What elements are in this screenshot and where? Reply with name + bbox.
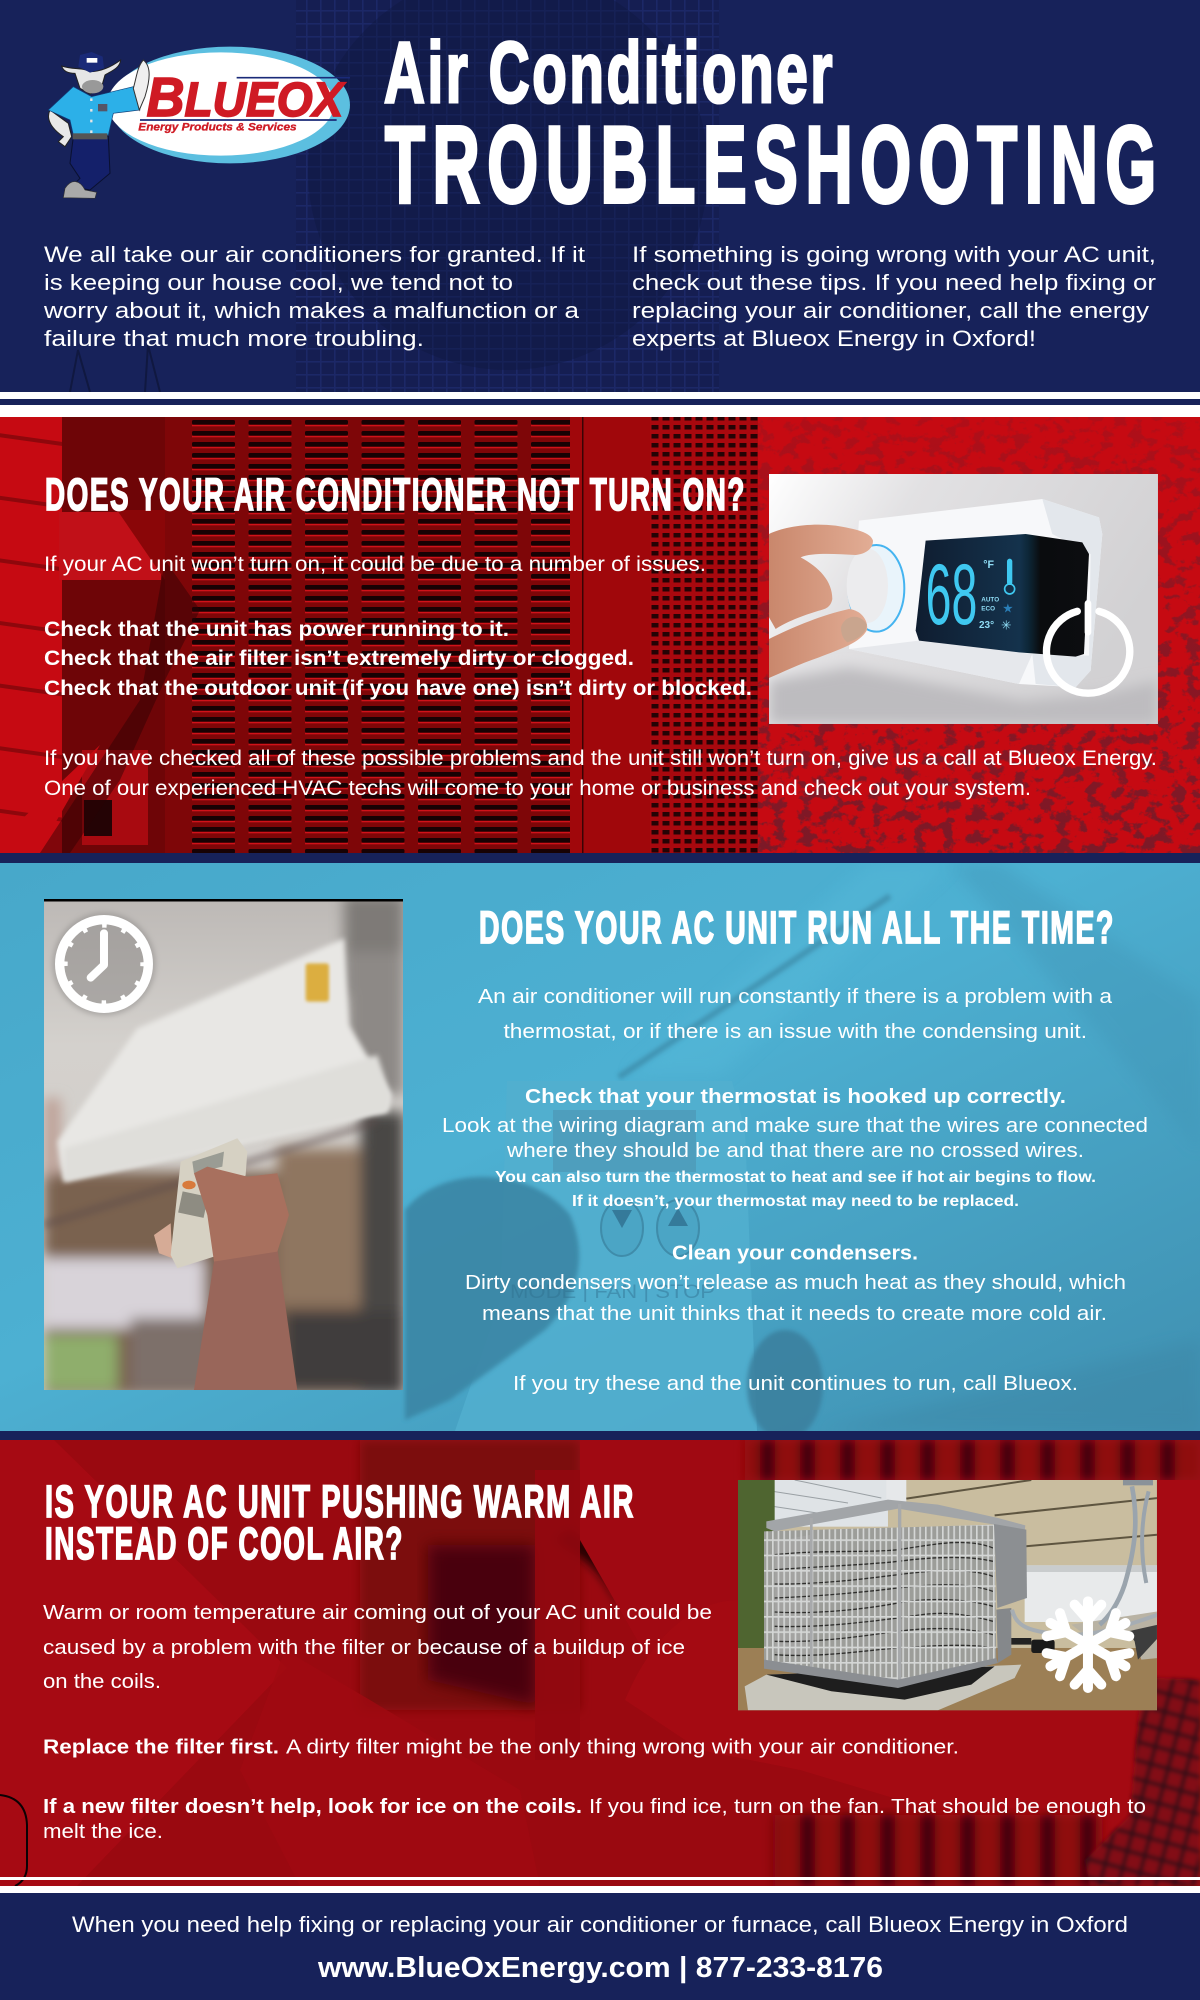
photo: hand adjusting smart thermostat: ★ xyxy=(1002,602,1014,616)
intro text: right column xyxy=(632,242,1157,351)
intro text: left column xyxy=(43,242,586,351)
text: look for ice: melt the ice. xyxy=(43,1820,163,1843)
intro text: left column: worry about it, which makes a malfunction or a xyxy=(43,298,580,323)
text: check thermostat: where they should be and that there are no crossed wires. xyxy=(506,1140,1084,1162)
mascot bull xyxy=(48,52,149,198)
text: checks list: Check that the unit has power running to it. xyxy=(44,618,509,641)
text: look for ice: If you find ice, turn on the fan. That should be enough to xyxy=(589,1795,1146,1818)
text: constant running intro: An air conditioner will run constantly if there is a problem with a xyxy=(478,986,1113,1008)
intro text: right column: replacing your air conditioner, call the energy xyxy=(632,298,1150,323)
photo: hand adjusting smart thermostat xyxy=(769,474,1158,724)
panel: does your air conditioner not turn on background xyxy=(0,417,1200,853)
photo: hand adjusting smart thermostat: 23° xyxy=(979,620,994,631)
text: constant running intro xyxy=(478,986,1113,1043)
logo: Blueox mascot and oval xyxy=(48,47,350,198)
photo: hand adjusting smart thermostat: 68 xyxy=(926,547,977,643)
photo: hand adjusting smart thermostat: AUTO xyxy=(981,596,999,603)
panel separator xyxy=(0,853,1200,863)
text: warm air intro xyxy=(43,1601,712,1693)
text: clean condensers: means that the unit thinks that it needs to create more cold air. xyxy=(482,1303,1107,1325)
photo: hand adjusting smart thermostat: °F xyxy=(983,559,995,571)
logo oval: BLUEOX xyxy=(147,66,346,128)
photo top rule xyxy=(44,899,403,902)
text: checks list xyxy=(44,618,752,700)
intro text: right column: If something is going wrong with your AC unit, xyxy=(632,242,1156,267)
panel: does your AC unit run all the time background: MODE | FAN | STOP xyxy=(510,1282,715,1303)
divider bars above footer xyxy=(0,1877,1200,1893)
footer call to action: When you need help fixing or replacing your air conditioner or furnace, call Blueox Energy in Oxford xyxy=(72,1912,1128,1937)
panel: does your AC unit run all the time background xyxy=(0,863,1200,1440)
text: warm air intro: Warm or room temperature air coming out of your AC unit could be xyxy=(43,1601,712,1624)
footer website and phone: www.BlueOxEnergy.com | 877-233-8176 xyxy=(317,1952,883,1984)
photo: hand pointing remote at wall AC unit xyxy=(44,895,404,1395)
heading: warm air: IS YOUR AC UNIT PUSHING WARM AIR xyxy=(45,1476,635,1527)
photo: outdoor AC condenser unit xyxy=(738,1480,1158,1711)
intro text: left column: failure that much more troubling. xyxy=(44,326,424,351)
text: look for ice: If a new filter doesn’t help, look for ice on the coils. xyxy=(43,1795,582,1818)
text: intro to turn on section: If your AC unit won’t turn on, it could be due to a number of issues. xyxy=(44,553,706,576)
text: checks list: Check that the air filter isn’t extremely dirty or clogged. xyxy=(44,647,634,670)
title xyxy=(384,25,1164,226)
text: replace the filter: A dirty filter might be the only thing wrong with your air conditioner. xyxy=(286,1736,959,1758)
photo: hand adjusting smart thermostat: ECO xyxy=(981,606,995,613)
photo: hand adjusting smart thermostat: ✳ xyxy=(1001,618,1012,632)
intro text: left column: is keeping our house cool, we tend not to xyxy=(44,270,513,295)
text: clean condensers xyxy=(465,1242,1126,1325)
panel: warm air background xyxy=(0,1440,1200,1886)
text: constant running intro: thermostat, or if there is an issue with the condensing unit. xyxy=(504,1021,1087,1043)
text: check thermostat: Look at the wiring diagram and make sure that the wires are connected xyxy=(442,1115,1148,1137)
text: call Blueox: If you have checked all of these possible problems and the unit still won’t turn on, give us a call at Blueox Energy. xyxy=(44,747,1157,770)
intro text: right column: experts at Blueox Energy in Oxford! xyxy=(632,326,1036,351)
text: replace the filter: Replace the filter first. xyxy=(43,1736,279,1758)
heading: warm air xyxy=(45,1476,635,1569)
text: look for ice xyxy=(43,1795,1146,1843)
panel: header background with faded fan grille xyxy=(69,0,719,392)
text: check thermostat: You can also turn the thermostat to heat and see if hot air begins to flow. xyxy=(495,1169,1096,1186)
text: warm air intro: on the coils. xyxy=(43,1670,161,1693)
text: replace the filter xyxy=(43,1736,959,1758)
icon: clock xyxy=(52,912,156,1016)
text: checks list: Check that the outdoor unit (if you have one) isn’t dirty or blocked. xyxy=(44,677,752,700)
logo oval xyxy=(107,47,350,163)
panel separator xyxy=(0,1431,1200,1440)
text: call Blueox if it continues: If you try these and the unit continues to run, call Blueox. xyxy=(513,1373,1078,1395)
heading: does your air conditioner not turn on: DOES YOUR AIR CONDITIONER NOT TURN ON? xyxy=(45,469,746,520)
intro text: left column: We all take our air conditioners for granted. If it xyxy=(44,242,586,267)
text: call Blueox xyxy=(44,747,1157,800)
heading: warm air: INSTEAD OF COOL AIR? xyxy=(45,1518,404,1569)
text: warm air intro: caused by a problem with the filter or because of a buildup of ice xyxy=(43,1636,685,1659)
text: check thermostat: If it doesn’t, your thermostat may need to be replaced. xyxy=(572,1193,1019,1210)
intro text: right column: check out these tips. If you need help fixing or xyxy=(632,270,1157,295)
title: Air Conditioner xyxy=(384,25,835,121)
text: call Blueox: One of our experienced HVAC techs will come to your home or business and check out your system. xyxy=(44,777,1031,800)
icon: snowflake xyxy=(1044,1601,1132,1688)
text: clean condensers: Clean your condensers. xyxy=(672,1242,918,1264)
text: clean condensers: Dirty condensers won’t release as much heat as they should, which xyxy=(465,1272,1126,1294)
logo oval: Energy Products & Services xyxy=(138,122,297,134)
panel: footer xyxy=(0,1893,1200,2000)
text: check thermostat xyxy=(442,1086,1148,1210)
divider bars under header xyxy=(0,392,1200,417)
text: check thermostat: Check that your thermostat is hooked up correctly. xyxy=(525,1086,1066,1108)
